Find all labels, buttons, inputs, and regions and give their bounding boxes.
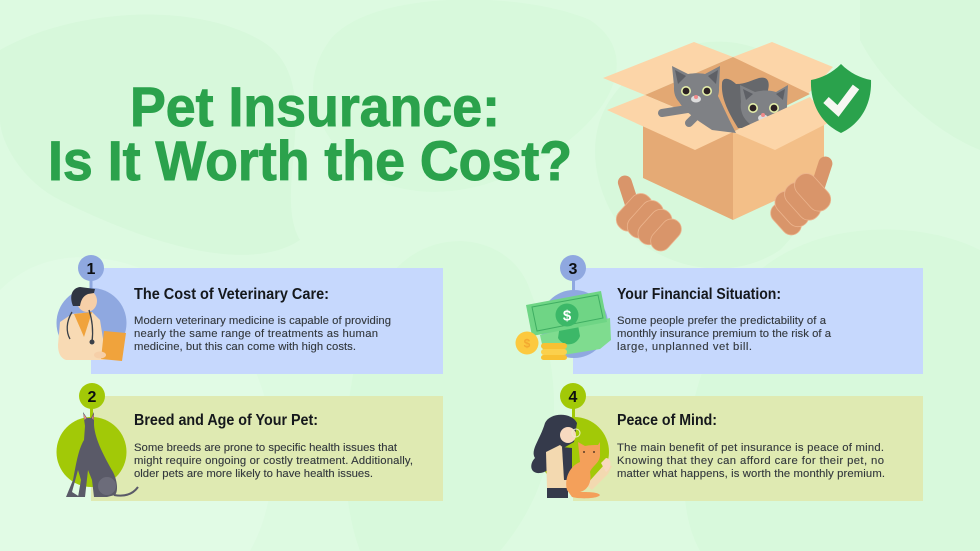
- title: [48, 75, 572, 192]
- body text: older pets are more likely to have health issues.: [134, 468, 373, 480]
- connector and backdrop circle: [56, 398, 126, 487]
- front flaps: [607, 95, 733, 150]
- icon: right thumbs-up hand: [767, 155, 835, 239]
- icon: cash and coins: $: [524, 336, 531, 350]
- heading: Breed and Age of Your Pet:: [134, 412, 318, 429]
- body text: large, unplanned vet bill.: [617, 341, 752, 353]
- heading: Peace of Mind:: [617, 412, 717, 429]
- icon: woman holding orange cat: [531, 415, 612, 498]
- icon: cash and coins: $: [563, 308, 572, 324]
- icon: left thumbs-up hand: [612, 174, 685, 255]
- number badge 4: 4: [569, 389, 578, 406]
- body text: Some breeds are prone to specific health issues that: [134, 442, 398, 454]
- heading: The Cost of Veterinary Care:: [134, 286, 329, 303]
- body text: might require ongoing or costly treatment. Additionally,: [134, 455, 413, 467]
- connector and backdrop circle: [540, 270, 608, 358]
- second grey cat: [722, 78, 788, 128]
- icon: cash and coins: [516, 291, 611, 360]
- body text: Modern veterinary medicine is capable of providing: [134, 315, 391, 327]
- body text: nearly the same range of treatments as human: [134, 328, 378, 340]
- number badge 3: [560, 255, 586, 281]
- title: Pet Insurance:: [130, 75, 500, 138]
- panel: 4 peace of mind: [531, 383, 923, 501]
- panel: 1 cost of veterinary care: [56, 255, 443, 374]
- body text: Knowing that they can afford care for their pet, no: [617, 455, 884, 467]
- connector and backdrop circle: [539, 398, 609, 487]
- body text: monthly insurance premium to the risk of a: [617, 328, 832, 340]
- body text: [617, 442, 885, 480]
- number badge 3: 3: [569, 261, 578, 278]
- body text: The main benefit of pet insurance is peace of mind.: [617, 442, 884, 454]
- title: Is It Worth the Cost?: [48, 129, 572, 192]
- illustration: cats in a box with shield and hands: [603, 42, 871, 255]
- body text: [617, 315, 832, 353]
- icon: green shield with check: [811, 64, 871, 133]
- box sides: [643, 107, 733, 220]
- back flaps of the box: [603, 42, 833, 95]
- panel: 3 financial situation: [516, 255, 923, 374]
- panel: 2 breed and age: [56, 383, 443, 501]
- body text: [134, 315, 391, 353]
- number badge 4: [560, 383, 586, 409]
- number badge 2: 2: [88, 389, 97, 406]
- number badge 2: [79, 383, 105, 409]
- body text: Some people prefer the predictability of a: [617, 315, 827, 327]
- box interior: [645, 57, 810, 132]
- heading: Your Financial Situation:: [617, 286, 781, 303]
- body text: [134, 442, 413, 480]
- first grey cat: [662, 66, 736, 133]
- icon: great dane dog: [66, 412, 138, 497]
- number badge 1: 1: [87, 261, 96, 278]
- connector and backdrop circle: [56, 270, 126, 358]
- body text: matter what happens, is worth the monthly premium.: [617, 468, 885, 480]
- body text: medicine, but this can come with high costs.: [134, 341, 356, 353]
- number badge 1: [78, 255, 104, 281]
- icon: veterinarian: [58, 287, 126, 361]
